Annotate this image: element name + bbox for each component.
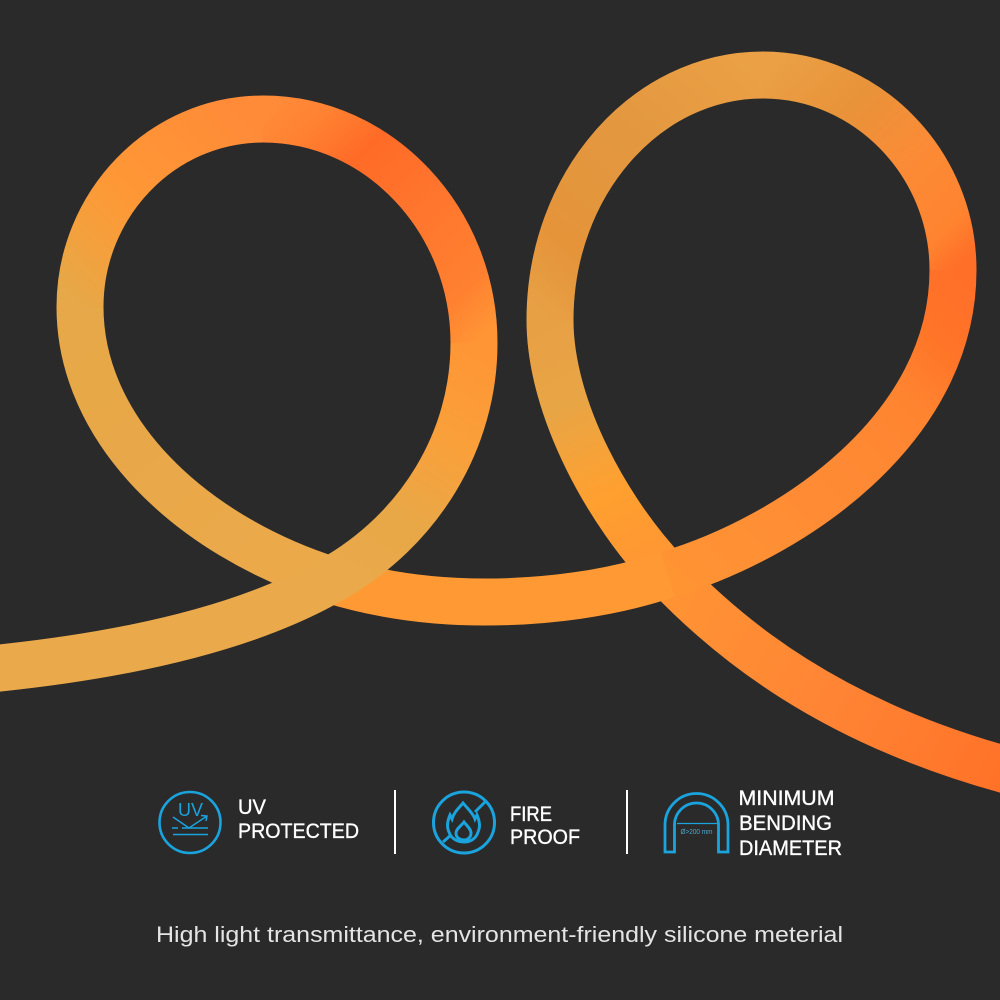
neon flex strip ribbon (0, 75, 1000, 771)
icon: UV protection: UV (178, 800, 203, 820)
label: UV protected: PROTECTED (238, 820, 359, 843)
divider (394, 790, 396, 854)
divider (626, 790, 628, 854)
icon: fire proof (434, 792, 494, 853)
label: fire proof (510, 803, 580, 849)
icon: UV protection (160, 792, 220, 853)
label: UV protected (238, 796, 359, 843)
label: minimum bending diameter: MINIMUM (738, 787, 834, 810)
label: minimum bending diameter: BENDING (739, 812, 832, 835)
icon: minimum bending diameter arch (665, 794, 728, 852)
label: minimum bending diameter: DIAMETER (739, 837, 842, 860)
caption: High light transmittance, environment-friendly silicone meterial (156, 922, 843, 947)
label: UV protected: UV (238, 796, 266, 819)
icon: minimum bending diameter arch: Ø>200 mm (680, 829, 713, 836)
label: fire proof: PROOF (510, 826, 580, 849)
label: fire proof: FIRE (510, 803, 552, 826)
label: minimum bending diameter (738, 787, 842, 860)
